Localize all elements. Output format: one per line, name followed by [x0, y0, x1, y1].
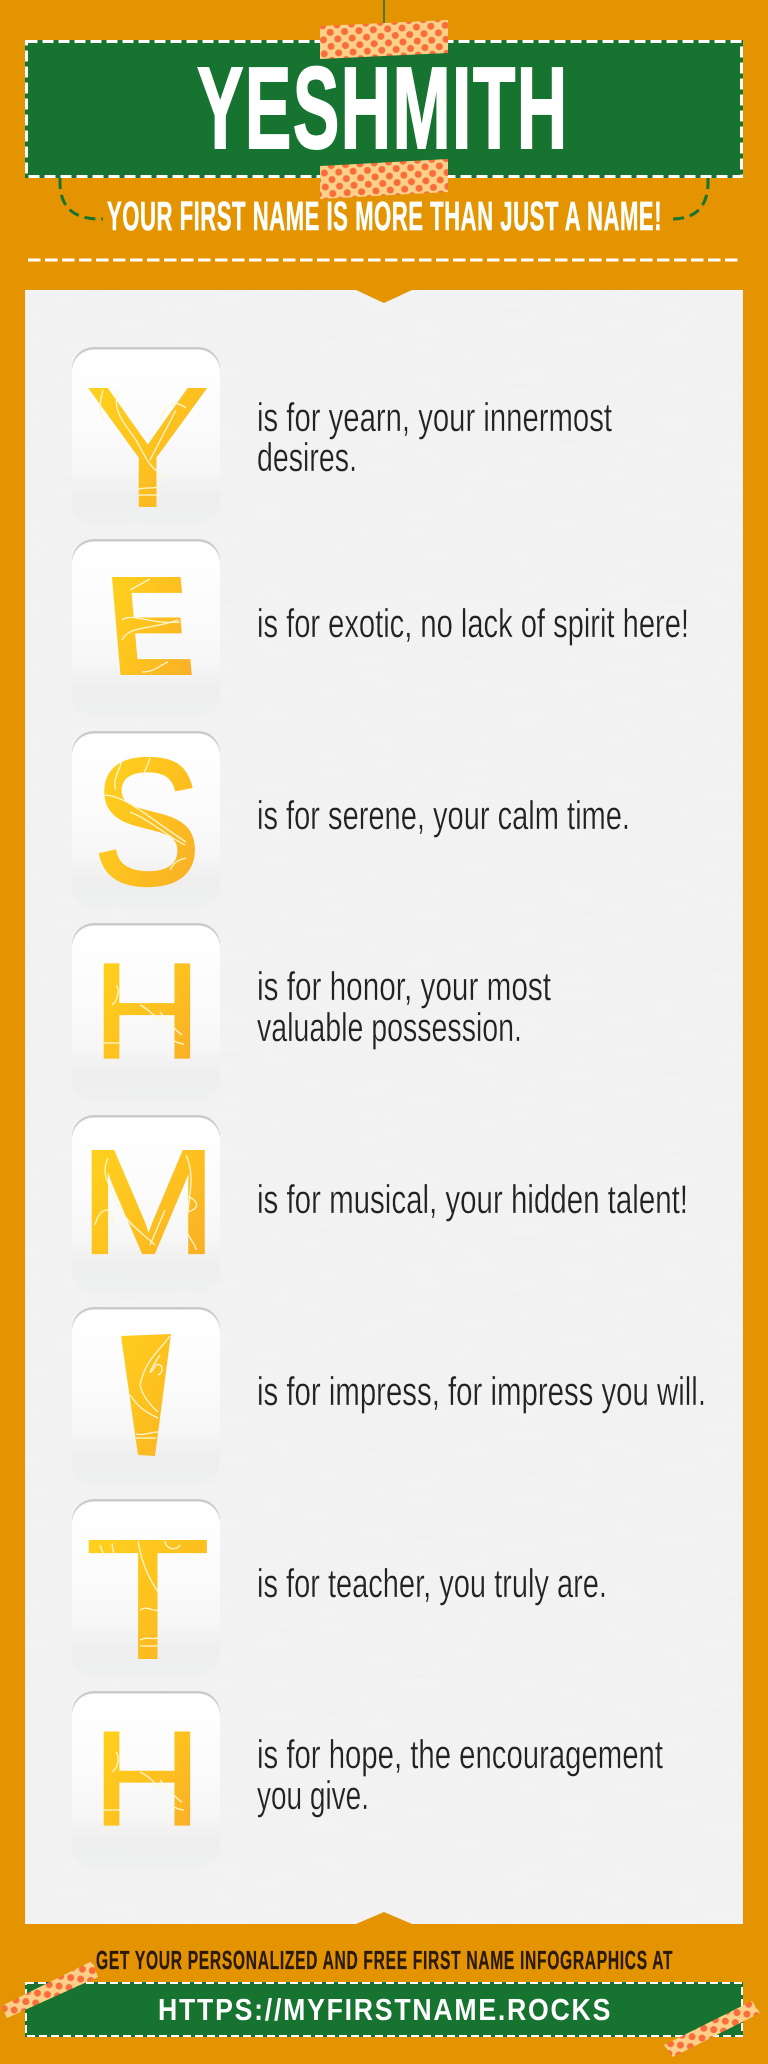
letter E: E [101, 547, 199, 706]
title: YESHMITH [197, 44, 567, 173]
row E [72, 539, 689, 718]
letter T: T [84, 1502, 212, 1696]
tile H 2 [72, 1691, 220, 1870]
text S: is for serene, your calm time. [257, 794, 630, 838]
dashed connector left [60, 178, 103, 219]
letter H: H [92, 934, 202, 1087]
tile S [72, 731, 220, 910]
letter S: S [93, 722, 201, 923]
title banner [25, 40, 743, 178]
letter I: I [98, 1293, 195, 1494]
panel: letters [25, 290, 743, 1924]
text T: is for teacher, you truly are. [257, 1562, 607, 1606]
text H 2: you give. [257, 1774, 369, 1818]
row M [72, 1115, 688, 1294]
letter M: M [80, 1120, 217, 1285]
text Y: is for yearn, your innermost [257, 396, 612, 440]
text H [257, 965, 551, 1050]
top notch [356, 290, 412, 303]
tile H [72, 923, 220, 1102]
row H 2 [72, 1691, 663, 1870]
text Y: desires. [257, 436, 357, 480]
tile I [72, 1307, 220, 1486]
tape: bottom [320, 159, 448, 199]
footer url: HTTPS://MYFIRSTNAME.ROCKS [158, 1993, 610, 2028]
tape: footer left [2, 1961, 98, 2018]
row Y [72, 347, 612, 544]
text H: is for honor, your most [257, 965, 551, 1009]
row H [72, 923, 551, 1102]
hanging thread [383, 0, 385, 24]
letter Y: Y [84, 350, 211, 544]
tile M [72, 1115, 220, 1294]
tile E [72, 539, 220, 718]
dashed connector right [669, 178, 708, 219]
text H: valuable possession. [257, 1006, 522, 1050]
tile T [72, 1499, 220, 1678]
subtitle: YOUR FIRST NAME IS MORE THAN JUST A NAME! [107, 193, 662, 239]
letter I [121, 1334, 171, 1456]
letter H 2: H [92, 1704, 202, 1854]
text Y [257, 396, 612, 480]
footer banner [25, 1982, 743, 2037]
tape: footer right [664, 2001, 760, 2057]
row I [72, 1293, 706, 1494]
text H 2 [257, 1733, 663, 1818]
footer prompt: GET YOUR PERSONALIZED AND FREE FIRST NAME INFOGRAPHICS AT [96, 1946, 673, 1975]
tape: top [320, 20, 448, 59]
tile Y [72, 347, 220, 526]
row S [72, 722, 630, 923]
white dashed divider [28, 258, 739, 262]
row T [72, 1499, 607, 1696]
bottom notch [356, 1912, 412, 1924]
